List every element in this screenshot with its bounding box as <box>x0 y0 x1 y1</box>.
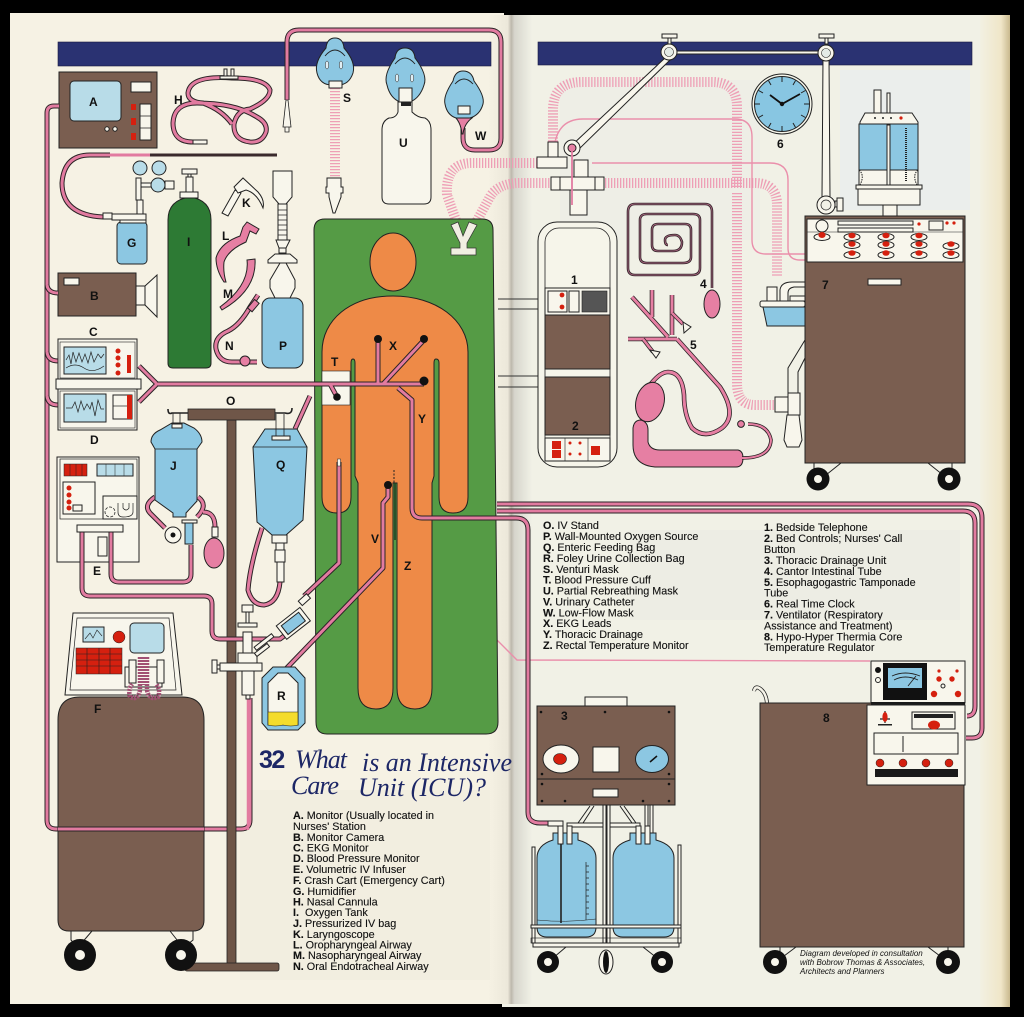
equipment letter labels: X <box>389 339 397 353</box>
icon: A monitor <box>59 72 157 148</box>
equipment letter labels: 3 <box>561 709 568 723</box>
equipment letter labels: 5 <box>690 338 697 352</box>
credit note: with Bobrow Thomas & Associates, <box>800 958 925 967</box>
legend: O to Z: S. Venturi Mask <box>543 564 619 576</box>
legend: O to Z: X. EKG Leads <box>543 618 612 630</box>
icon: 5 esophagogastric tamponade tube <box>628 290 771 467</box>
bed connection rails <box>498 299 538 387</box>
monitor cables to A, B, C, D <box>47 106 250 829</box>
legend: 1 to 8: 4. Cantor Intestinal Tube <box>764 566 882 578</box>
legend: O to Z: V. Urinary Catheter <box>543 596 635 608</box>
title: Unit (ICU)? <box>358 773 486 802</box>
icon: K laryngoscope <box>222 178 263 216</box>
icon: Y bed connector <box>451 222 477 255</box>
equipment letter labels: D <box>90 433 99 447</box>
legend: O to Z: U. Partial Rebreathing Mask <box>543 586 679 598</box>
top meter <box>871 661 965 703</box>
legend: A to N: C. EKG Monitor <box>293 842 369 854</box>
equipment letter labels: P <box>279 339 287 353</box>
equipment letter labels <box>89 91 830 725</box>
legend: A to N: A. Monitor (Usually located in <box>293 810 434 822</box>
legend: O to Z: R. Foley Urine Collection Bag <box>543 553 685 565</box>
equipment letter labels: H <box>174 93 183 107</box>
equipment letter labels: V <box>371 532 379 546</box>
equipment letter labels: 7 <box>822 278 829 292</box>
credit note: Diagram developed in consultation <box>800 949 923 958</box>
title: Care <box>291 771 339 800</box>
icon: 6 real time clock <box>752 74 812 134</box>
title: What <box>295 745 348 774</box>
legend: A to N: N. Oral Endotracheal Airway <box>293 961 429 973</box>
thin pink tubes behind ventilator <box>395 119 870 661</box>
panel: bedside unit with telephone and controls <box>538 222 617 467</box>
legend: O to Z: O. IV Stand <box>543 520 599 532</box>
legend: A to N: I. Oxygen Tank <box>293 907 368 919</box>
legend: 1 to 8: 2. Bed Controls; Nurses' Call <box>764 533 902 545</box>
equipment letter labels: Y <box>418 412 426 426</box>
legend: A to N: E. Volumetric IV Infuser <box>293 864 406 876</box>
icon: ventilator exhalation valve <box>775 340 805 447</box>
corrugated breathing tubes <box>335 82 777 405</box>
panel: 7 ventilator <box>805 90 965 490</box>
icon: G humidifier and regulator <box>103 161 174 264</box>
legend: 1 to 8: Temperature Regulator <box>764 642 875 654</box>
equipment letter labels: N <box>225 339 234 353</box>
icon: ventilator water trap <box>760 282 805 326</box>
title: is an Intensive <box>362 748 512 777</box>
icon: ventilator manifold <box>537 140 604 215</box>
lower control panel <box>867 705 965 785</box>
icon: R Foley urine collection bag <box>262 667 305 730</box>
icon: 4 Cantor intestinal tube <box>628 204 720 318</box>
equipment letter labels: M <box>223 287 233 301</box>
icon: S venturi mask <box>316 38 354 213</box>
icon: O IV stand <box>168 408 292 971</box>
equipment letter labels: O <box>226 394 235 408</box>
panel: 3 thoracic drainage unit <box>531 697 681 974</box>
legend: A to N <box>293 810 445 973</box>
legend: O to Z: P. Wall-Mounted Oxygen Source <box>543 531 698 543</box>
equipment letter labels: W <box>475 129 487 143</box>
patient figure <box>322 233 468 709</box>
equipment letter labels: J <box>170 459 177 473</box>
icon: W low-flow mask <box>445 71 483 134</box>
icon: D blood pressure monitor <box>58 389 137 430</box>
telephone panel <box>545 288 610 315</box>
legend: 1 to 8: 6. Real Time Clock <box>764 598 855 610</box>
legend: A to N: H. Nasal Cannula <box>293 896 378 908</box>
legend: A to N: B. Monitor Camera <box>293 832 384 844</box>
equipment letter labels: C <box>89 325 98 339</box>
credit note: Architects and Planners <box>799 967 884 976</box>
equipment letter labels: 4 <box>700 277 707 291</box>
legend: 1 to 8: Assistance and Treatment) <box>764 620 892 632</box>
equipment letter labels: F <box>94 702 101 716</box>
icon: B monitor camera <box>58 273 157 317</box>
icon: N oral endotracheal airway <box>216 295 259 366</box>
icon: U partial rebreathing mask and bag <box>382 48 431 204</box>
icon: L oropharyngeal airway <box>216 222 259 282</box>
legend: O to Z: T. Blood Pressure Cuff <box>543 574 652 586</box>
legend: 1 to 8: 1. Bedside Telephone <box>764 522 868 534</box>
icon: F crash cart <box>58 613 204 971</box>
icon: monitor shelf <box>56 379 141 389</box>
legend: 1 to 8: Tube <box>764 588 788 600</box>
equipment letter labels: K <box>242 196 251 210</box>
legend: 1 to 8: 7. Ventilator (Respiratory <box>764 610 883 622</box>
legend: A to N: K. Laryngoscope <box>293 929 375 941</box>
legend: O to Z: Z. Rectal Temperature Monitor <box>543 640 689 652</box>
equipment letter labels: 2 <box>572 419 579 433</box>
equipment letter labels: U <box>399 136 408 150</box>
equipment letter labels: G <box>127 236 136 250</box>
core temperature tubes to unit 8 <box>497 504 982 738</box>
thoracic drainage tube Y <box>398 388 548 823</box>
ceiling rail: left <box>58 42 491 66</box>
legend: A to N: M. Nasopharyngeal Airway <box>293 950 422 962</box>
equipment letter labels: 1 <box>571 273 578 287</box>
legend: A to N: Nurses' Station <box>293 821 366 833</box>
equipment letter labels: L <box>222 229 229 243</box>
legend: A to N: F. Crash Cart (Emergency Cart) <box>293 875 445 887</box>
equipment letter labels: B <box>90 289 99 303</box>
legend: O to Z: Q. Enteric Feeding Bag <box>543 542 655 554</box>
credit note <box>799 949 925 976</box>
blood pressure cuff <box>322 371 350 405</box>
legend: 1 to 8: 5. Esophagogastric Tamponade <box>764 577 916 589</box>
icon: H nasal cannula <box>173 69 270 144</box>
urinary catheter V <box>280 481 392 675</box>
legend: A to N: D. Blood Pressure Monitor <box>293 853 420 865</box>
title: 32 <box>259 746 284 774</box>
equipment letter labels: S <box>343 91 351 105</box>
icon: P wall-mounted oxygen source <box>262 171 303 368</box>
equipment letter labels: R <box>277 689 286 703</box>
oxygen mask tube <box>283 30 501 150</box>
equipment letter labels: E <box>93 564 101 578</box>
rectal temperature probe Z <box>394 470 395 540</box>
legend: 1 to 8: 8. Hypo-Hyper Thermia Core <box>764 632 902 644</box>
icon: Q enteric feeding bag <box>248 396 310 605</box>
equipment letter labels: Q <box>276 458 285 472</box>
legend: A to N: L. Oropharyngeal Airway <box>293 940 412 952</box>
equipment letter labels: A <box>89 95 98 109</box>
panel: 8 hypo-hyper thermia regulator <box>754 661 965 974</box>
IV line in arm <box>304 459 340 596</box>
icon: E volumetric IV infuser <box>57 457 292 639</box>
equipment letter labels: I <box>187 235 190 249</box>
icon: C EKG monitor <box>58 339 137 380</box>
legend: O to Z: W. Low-Flow Mask <box>543 608 634 620</box>
legend: 1 to 8 <box>764 522 916 654</box>
crash cart cable overlay <box>58 826 204 832</box>
equipment letter labels: 6 <box>777 137 784 151</box>
equipment letter labels: 8 <box>823 711 830 725</box>
icon: M nasopharyngeal airway <box>220 259 255 310</box>
call button panel <box>545 438 610 461</box>
EKG cable and leads <box>139 335 428 402</box>
title <box>259 745 512 802</box>
ceiling rail: right <box>538 42 972 65</box>
legend: 1 to 8: Button <box>764 544 795 556</box>
legend: A to N: G. Humidifier <box>293 886 356 898</box>
icon: J pressurized IV bag <box>147 413 224 568</box>
legend: O to Z: Y. Thoracic Drainage <box>543 629 643 641</box>
control panel <box>807 219 963 262</box>
icon: IV pump and regulator <box>212 594 310 830</box>
legend: A to N: J. Pressurized IV bag <box>293 918 396 930</box>
icon: I oxygen tank <box>168 169 211 368</box>
legend: 1 to 8: 3. Thoracic Drainage Unit <box>764 555 886 567</box>
humidifier oxygen tube <box>62 155 277 217</box>
legend: O to Z <box>543 520 698 652</box>
equipment letter labels: Z <box>404 559 411 573</box>
icon: articulated ceiling arm <box>571 34 843 214</box>
panel: patient bed <box>314 219 498 734</box>
equipment letter labels: T <box>331 355 339 369</box>
